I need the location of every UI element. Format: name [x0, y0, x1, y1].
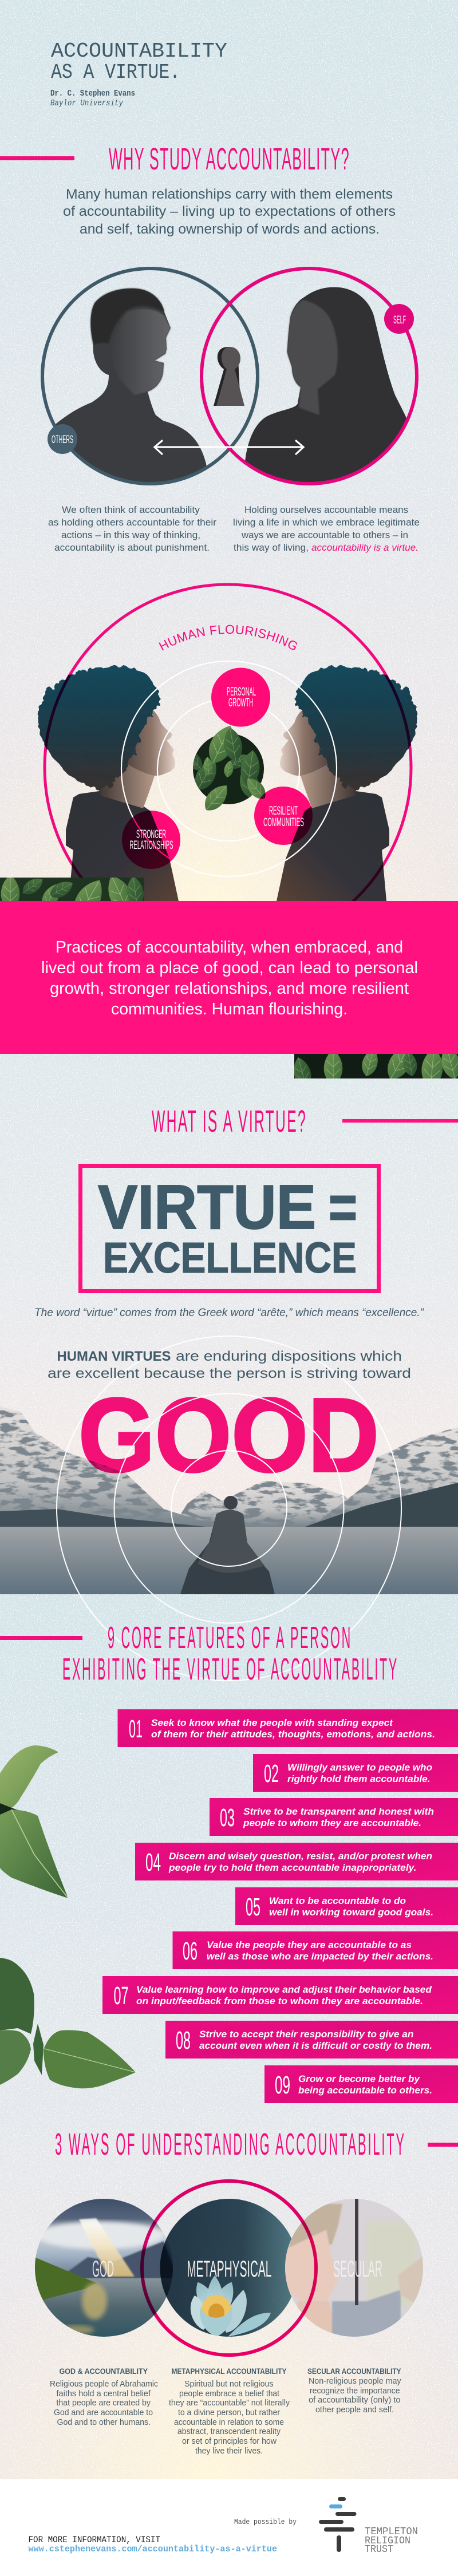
- lake: [0, 1527, 458, 1594]
- flower: [191, 2275, 271, 2337]
- feature 04: 04: [145, 1848, 161, 1876]
- badge: others: OTHERS: [52, 434, 73, 446]
- leaf right: [44, 2030, 136, 2088]
- main title: AS A VIRTUE.: [51, 61, 180, 84]
- main title: ACCOUNTABILITY: [51, 39, 227, 63]
- text: holding others accountable: We often think of accountability: [62, 505, 200, 515]
- background: features sky panel: [0, 1594, 458, 2479]
- column: metaphysical accountability: accountable in relation to some: [174, 2417, 284, 2427]
- decoration: green leaves at left: [0, 1745, 136, 2088]
- badge: resilient communities: [254, 787, 313, 845]
- circle: god: [34, 2198, 177, 2338]
- column: god and accountability: faiths hold a central belief: [56, 2389, 151, 2399]
- badge: self: SELF: [393, 314, 406, 326]
- column: secular accountability: other people and self.: [315, 2405, 394, 2415]
- photo strip: leaves right: [294, 1054, 458, 1078]
- badge: personal growth: PERSONAL: [227, 685, 256, 698]
- feature 05: [235, 1887, 458, 1925]
- column: god and accountability: [50, 2366, 158, 2427]
- logo: templeton religion trust: RELIGION: [365, 2535, 410, 2547]
- feature 08: 08: [176, 2026, 191, 2055]
- text: human virtues definition: are excellent because the person is striving toward: [48, 1366, 411, 1381]
- text: holding ourselves accountable: Holding ourselves accountable means: [244, 505, 408, 515]
- circle: god: GOD: [92, 2257, 114, 2282]
- badge: personal growth: GROWTH: [228, 696, 253, 709]
- feature 06: 06: [183, 1937, 198, 1965]
- main title: [51, 39, 227, 84]
- badge: stronger relationships: [122, 811, 180, 869]
- arc label: HUMAN FLOURISHING: [159, 625, 297, 651]
- woman seen from behind: [180, 1496, 275, 1594]
- panel: practices of accountability: communities. Human flourishing.: [111, 1000, 348, 1018]
- column: metaphysical accountability: people embrace a belief that: [179, 2389, 280, 2399]
- intro paragraph: and self, taking ownership of words and actions.: [80, 222, 380, 237]
- rule: [342, 1119, 458, 1123]
- arrow: double headed: [154, 440, 304, 455]
- circle: self: [202, 268, 417, 484]
- feature 05: 05: [246, 1893, 260, 1921]
- concentric rings: [57, 1336, 401, 1681]
- photo: mountains and lake: [0, 1406, 458, 1594]
- leaf lower: [0, 1809, 68, 1898]
- column: secular accountability: Non-religious people may: [309, 2376, 401, 2386]
- note: greek word: The word “virtue” comes from the Greek word “arête,” which means “excellence.”: [34, 1307, 425, 1319]
- feature 03: Strive to be transparent and honest with: [243, 1806, 434, 1817]
- text: human virtues definition: are enduring dispositions which: [176, 1349, 402, 1364]
- author: [50, 89, 135, 108]
- woman profile left: [38, 666, 179, 901]
- woman profile right: [277, 666, 417, 901]
- feature 09: 09: [275, 2071, 290, 2099]
- section: 9 core features: [0, 1621, 458, 2103]
- badge: resilient communities: COMMUNITIES: [263, 816, 304, 829]
- feature 04: people try to hold them accountable inappropriately.: [168, 1862, 417, 1873]
- badge: others: [48, 424, 77, 454]
- text: holding others accountable: accountability is about punishment.: [54, 543, 210, 553]
- leaf centre: [193, 726, 266, 811]
- logo: templeton religion trust: TRUST: [365, 2544, 393, 2555]
- column: god and accountability: that people are created by: [56, 2398, 151, 2408]
- leaf middle: [0, 1958, 34, 2034]
- rule: [0, 156, 74, 160]
- photo: man silhouette: [53, 289, 209, 487]
- word: GOOD: GOOD: [78, 1376, 379, 1494]
- feature 01: 01: [129, 1715, 143, 1743]
- text: holding ourselves accountable: this way of living,: [234, 543, 309, 553]
- footer: [0, 2479, 458, 2576]
- feature 03: people to whom they are accountable.: [243, 1818, 421, 1828]
- panel: practices of accountability: lived out from a place of good, can lead to personal: [41, 959, 418, 977]
- text: holding others accountable: actions – in this way of thinking,: [61, 530, 200, 540]
- panel: practices of accountability: Practices of accountability, when embraced, and: [56, 938, 403, 957]
- inner white rings: [121, 661, 337, 876]
- title block: [50, 39, 227, 108]
- column: god and accountability: God and are accountable to: [54, 2408, 153, 2417]
- badge: self: [384, 304, 414, 334]
- intro paragraph: of accountability – living up to expectations of others: [63, 204, 396, 219]
- feature 06: well as those who are impacted by their actions.: [207, 1951, 433, 1962]
- section: why study accountability: [0, 142, 396, 237]
- text: holding ourselves accountable: [233, 505, 420, 553]
- author: Dr. C. Stephen Evans: [50, 89, 135, 98]
- text: holding ourselves accountable: accountability is a virtue.: [311, 543, 418, 553]
- ring around metaphysical: [142, 2181, 316, 2355]
- outer ring: [44, 583, 412, 901]
- column: god and accountability: Religious people of Abrahamic: [50, 2379, 158, 2389]
- mountain: left: [0, 1406, 218, 1530]
- feature 06: [173, 1931, 458, 1969]
- leaf small: [0, 2030, 31, 2085]
- column: metaphysical accountability: to a divine person, but rather: [178, 2408, 280, 2417]
- photo: woman silhouette: [245, 287, 406, 482]
- column: metaphysical accountability: Spiritual but not religious: [184, 2379, 274, 2389]
- background: top sky panel: [0, 0, 458, 901]
- circle: metaphysical: METAPHYSICAL: [187, 2257, 271, 2282]
- box: virtue equals excellence: =: [329, 1172, 357, 1242]
- feature 02: [253, 1754, 458, 1792]
- column: metaphysical accountability: they are “accountable” not literally: [169, 2398, 290, 2408]
- feature 07: Value learning how to improve and adjust their behavior based: [136, 1984, 432, 1995]
- feature 03: [210, 1798, 458, 1836]
- mountain: far centre: [181, 1481, 348, 1527]
- venn diagram: others and self: [42, 268, 427, 492]
- feature 06: Value the people they are accountable to as: [207, 1939, 412, 1950]
- badge: stronger relationships: RELATIONSHIPS: [129, 839, 173, 852]
- circle: secular: SECULAR: [333, 2257, 382, 2282]
- text: holding others accountable: [48, 505, 217, 553]
- section: 3 ways: [34, 2127, 458, 2456]
- feature 05: well in working toward good goals.: [269, 1907, 433, 1918]
- author: Baylor University: [50, 98, 124, 108]
- heading: [62, 1621, 398, 1686]
- feature 01: [118, 1709, 458, 1747]
- rule: [0, 1636, 82, 1640]
- column: metaphysical accountability: METAPHYSICAL ACCOUNTABILITY: [172, 2366, 287, 2376]
- feature 03: 03: [220, 1804, 235, 1832]
- box: virtue equals excellence: VIRTUE: [98, 1172, 316, 1242]
- panel: practices of accountability: [0, 901, 458, 1054]
- column: god and accountability: God and to other humans.: [57, 2417, 151, 2427]
- feature 08: Strive to accept their responsibility to give an: [199, 2029, 413, 2040]
- feature 02: Willingly answer to people who: [287, 1762, 432, 1773]
- box: virtue equals excellence: [80, 1165, 379, 1291]
- circle: others: [42, 268, 258, 484]
- feature 02: rightly hold them accountable.: [287, 1773, 431, 1784]
- background: virtue sky panel: [0, 1054, 458, 1594]
- feature 07: [102, 1976, 458, 2014]
- diagram: human flourishing: [0, 583, 418, 901]
- feature 05: Want to be accountable to do: [269, 1895, 406, 1906]
- feature 09: Grow or become better by: [298, 2073, 421, 2084]
- mountain: right: [303, 1427, 458, 1527]
- logo: templeton religion trust: TEMPLETON: [365, 2526, 418, 2538]
- icon: keyhole: [214, 347, 244, 406]
- call to action: [29, 2535, 277, 2554]
- text: holding ourselves accountable: living a life in which we embrace legitimate: [233, 517, 420, 528]
- column: secular accountability: [307, 2366, 401, 2415]
- panel: practices of accountability: growth, stronger relationships, and more resilient: [50, 979, 409, 998]
- column: metaphysical accountability: abstract, transcendent reality: [177, 2427, 281, 2436]
- text: human virtues definition: [48, 1349, 411, 1381]
- leaf upper: [0, 1745, 58, 1809]
- feature 09: being accountable to others.: [298, 2085, 432, 2096]
- column: metaphysical accountability: [169, 2366, 290, 2456]
- circle: metaphysical: [160, 2199, 298, 2337]
- column: secular accountability: recognize the importance: [310, 2386, 400, 2396]
- column: secular accountability: of accountability (only) to: [309, 2395, 401, 2405]
- leaf dark join: [0, 1803, 23, 1820]
- text: holding ourselves accountable: ways we are accountable to others – in: [241, 530, 408, 540]
- feature 09: [264, 2065, 458, 2103]
- text: holding others accountable: as holding others accountable for their: [48, 517, 217, 528]
- call to action: www.cstephenevans.com/accountability-as-a-virtue: [29, 2544, 277, 2554]
- circle: secular: [285, 2198, 424, 2338]
- badge: stronger relationships: STRONGER: [136, 828, 166, 841]
- feature 01: of them for their attitudes, thoughts, emotions, and actions.: [151, 1729, 435, 1740]
- column: secular accountability: SECULAR ACCOUNTABILITY: [307, 2366, 401, 2376]
- column: metaphysical accountability: they live their lives.: [195, 2446, 263, 2456]
- box: virtue equals excellence: EXCELLENCE: [103, 1234, 357, 1282]
- column: god and accountability: GOD & ACCOUNTABILITY: [60, 2366, 148, 2376]
- sponsor note: Made possible by: [234, 2518, 297, 2526]
- rule: [428, 2143, 458, 2147]
- feature 01: Seek to know what the people with standing expect: [151, 1717, 393, 1728]
- logo: templeton religion trust: [319, 2497, 418, 2555]
- section: what is a virtue: [34, 1104, 458, 1319]
- feature 07: 07: [113, 1982, 128, 2010]
- intro paragraph: Many human relationships carry with them elements: [66, 187, 393, 202]
- feature 02: 02: [264, 1760, 279, 1788]
- feature 04: Discern and wisely question, resist, and/or protest when: [169, 1851, 432, 1862]
- badge: resilient communities: RESILIENT: [269, 804, 298, 817]
- text: human virtues definition: HUMAN VIRTUES: [57, 1349, 171, 1364]
- column: metaphysical accountability: or set of principles for how: [182, 2436, 277, 2446]
- treelines: [0, 1483, 458, 1530]
- badge: personal growth: [211, 667, 270, 727]
- photo strip: leaves left: [0, 878, 144, 901]
- feature 04: [135, 1843, 458, 1880]
- intro paragraph: [63, 187, 396, 237]
- call to action: FOR MORE INFORMATION, VISIT: [29, 2535, 160, 2545]
- feature 08: [165, 2021, 458, 2059]
- feature 07: on input/feedback from those to whom they are accountable.: [136, 1996, 423, 2006]
- feature 08: account even when it is difficult or costly to them.: [199, 2040, 432, 2051]
